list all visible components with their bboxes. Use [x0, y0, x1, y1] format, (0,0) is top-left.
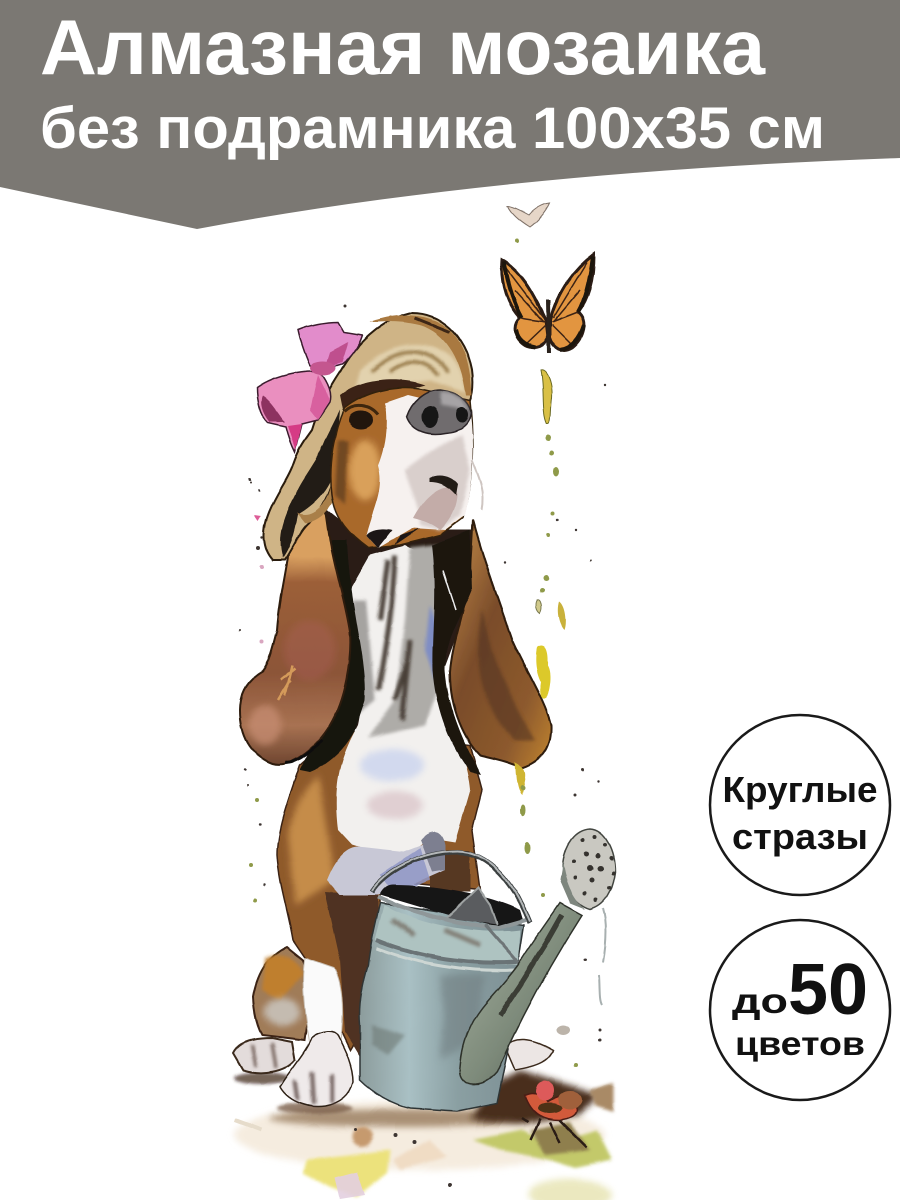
- dog body: [233, 505, 553, 1106]
- illustration: basset hound with watering can: [233, 203, 615, 1200]
- left ear: [240, 505, 350, 764]
- drip from ear: [515, 762, 525, 795]
- back haunch: [253, 947, 312, 1040]
- pink bow: [257, 322, 362, 452]
- can opening: [380, 885, 523, 927]
- badge: round rhinestones: Круглые: [722, 769, 878, 810]
- neck dark left band: [300, 540, 365, 772]
- spout: [460, 903, 582, 1084]
- muzzle white: [366, 395, 473, 548]
- right paw: [505, 1039, 553, 1070]
- badge: round rhinestones: стразы: [732, 816, 868, 857]
- ground wash: [234, 1070, 613, 1200]
- badge: up to 50 colours: 50: [788, 950, 868, 1030]
- back paw: [233, 1038, 295, 1073]
- can body: [359, 903, 524, 1111]
- small faded butterfly: [508, 203, 550, 227]
- front leg: [303, 958, 342, 1045]
- black inner ear band: [432, 530, 481, 775]
- red flower bug: [522, 1081, 587, 1147]
- badge: round rhinestones: [710, 715, 890, 895]
- nose: [407, 390, 471, 434]
- white chest: [336, 545, 470, 860]
- straw hat: [264, 313, 473, 560]
- badge: up to 50 colours: [710, 920, 890, 1100]
- torso brown sides: [277, 730, 482, 1050]
- handle: [372, 852, 530, 923]
- badge: up to 50 colours: до: [732, 982, 788, 1021]
- eye: [349, 411, 373, 429]
- title: Алмазная мозаика: [40, 3, 766, 91]
- watering can: [359, 829, 615, 1111]
- front paw: [280, 1032, 353, 1106]
- neck underlay: [322, 505, 472, 730]
- right ear: [432, 520, 551, 795]
- water drip: [599, 908, 606, 1005]
- subtitle: без подрамника 100х35 см: [40, 96, 825, 161]
- badge: up to 50 colours: цветов: [735, 1025, 865, 1062]
- header banner: [0, 0, 900, 229]
- paint splashes: [239, 239, 606, 1187]
- grey belly: [327, 838, 445, 895]
- large monarch butterfly: [502, 254, 594, 353]
- dog head: [331, 388, 483, 548]
- rose head: [563, 829, 615, 909]
